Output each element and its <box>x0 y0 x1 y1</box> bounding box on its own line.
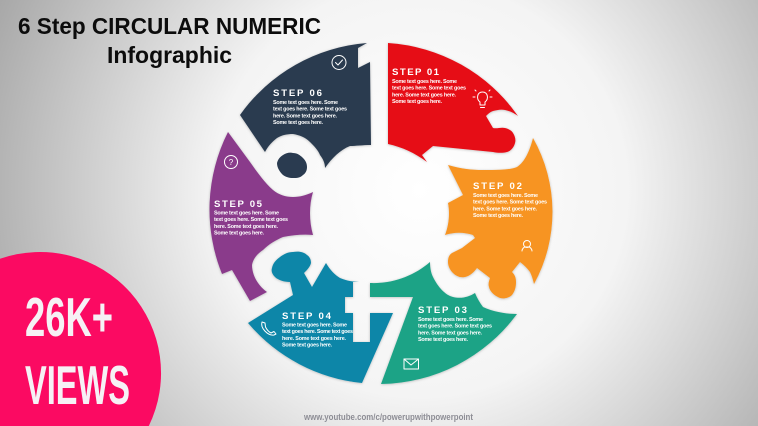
step 04 heading: STEP 04 <box>282 311 332 322</box>
step 04 text: text goes here. Some text goes <box>282 329 353 335</box>
step 01 text <box>392 79 466 105</box>
badge: views <box>0 252 161 426</box>
step 03 text: Some text goes here. <box>418 337 468 343</box>
panel: step 06 <box>240 43 371 178</box>
panel: step 03 <box>370 262 517 384</box>
numeral blob <box>277 153 307 178</box>
step 03 text: here. Some text goes here. <box>418 330 482 336</box>
step 04 text <box>282 322 353 348</box>
step 04 text: Some text goes here. Some <box>282 322 347 328</box>
views label: VIEWS <box>25 354 130 416</box>
title: Infographic <box>107 42 232 68</box>
step 05 text: Some text goes here. <box>214 230 264 236</box>
icon: phone <box>262 322 276 335</box>
step 02 text: here. Some text goes here. <box>473 206 538 212</box>
step 06 text: Some text goes here. <box>273 120 324 126</box>
step 05 heading: STEP 05 <box>214 199 263 210</box>
step 06 text: Some text goes here. Some <box>273 100 338 106</box>
panel: step 02 <box>445 138 552 298</box>
step 05 text: here. Some text goes here. <box>214 224 278 230</box>
step 01 text: text goes here. Some text goes <box>392 86 466 92</box>
step 01 text: Some text goes here. <box>392 99 442 105</box>
footer url: www.youtube.com/c/powerupwithpowerpoint <box>303 412 474 423</box>
step 02 text: text goes here. Some text goes <box>473 200 547 206</box>
step 05 text: text goes here. Some text goes <box>214 217 288 223</box>
icon: question mark <box>224 156 238 168</box>
icon: check mark <box>332 56 346 70</box>
step 01 text: here. Some text goes here. <box>392 92 456 98</box>
step 06 text: text goes here. Some text goes <box>273 107 347 113</box>
icon: light bulb <box>473 90 492 108</box>
step 04 text: Some text goes here. <box>282 342 332 348</box>
step 05 text: Some text goes here. Some <box>214 210 279 216</box>
panel: step 04 <box>248 252 393 383</box>
icon: person <box>522 240 532 251</box>
step 03 text: Some text goes here. Some <box>418 317 483 323</box>
step 02 heading: STEP 02 <box>473 181 522 192</box>
step 02 text: Some text goes here. <box>473 213 524 219</box>
step 02 text: Some text goes here. Some <box>473 193 538 199</box>
step 02 text <box>473 193 547 219</box>
step 03 text <box>418 317 492 343</box>
step 04 text: here. Some text goes here. <box>282 336 346 342</box>
step 06 heading: STEP 06 <box>273 88 322 99</box>
panel: step 01 <box>388 43 518 162</box>
step 06 text <box>273 100 347 126</box>
icon: question mark: ? <box>229 158 234 167</box>
step 05 text <box>214 210 288 236</box>
views count: 26K+ <box>25 286 113 348</box>
panel: step 05 <box>209 132 313 301</box>
title: 6 Step CIRCULAR NUMERIC <box>18 13 321 39</box>
icon: envelope <box>404 359 418 369</box>
step 03 heading: STEP 03 <box>418 305 467 316</box>
title <box>18 13 321 68</box>
step 01 heading: STEP 01 <box>392 67 440 78</box>
step 06 text: here. Some text goes here. <box>273 113 338 119</box>
step 01 text: Some text goes here. Some <box>392 79 457 85</box>
step 03 text: text goes here. Some text goes <box>418 324 492 330</box>
